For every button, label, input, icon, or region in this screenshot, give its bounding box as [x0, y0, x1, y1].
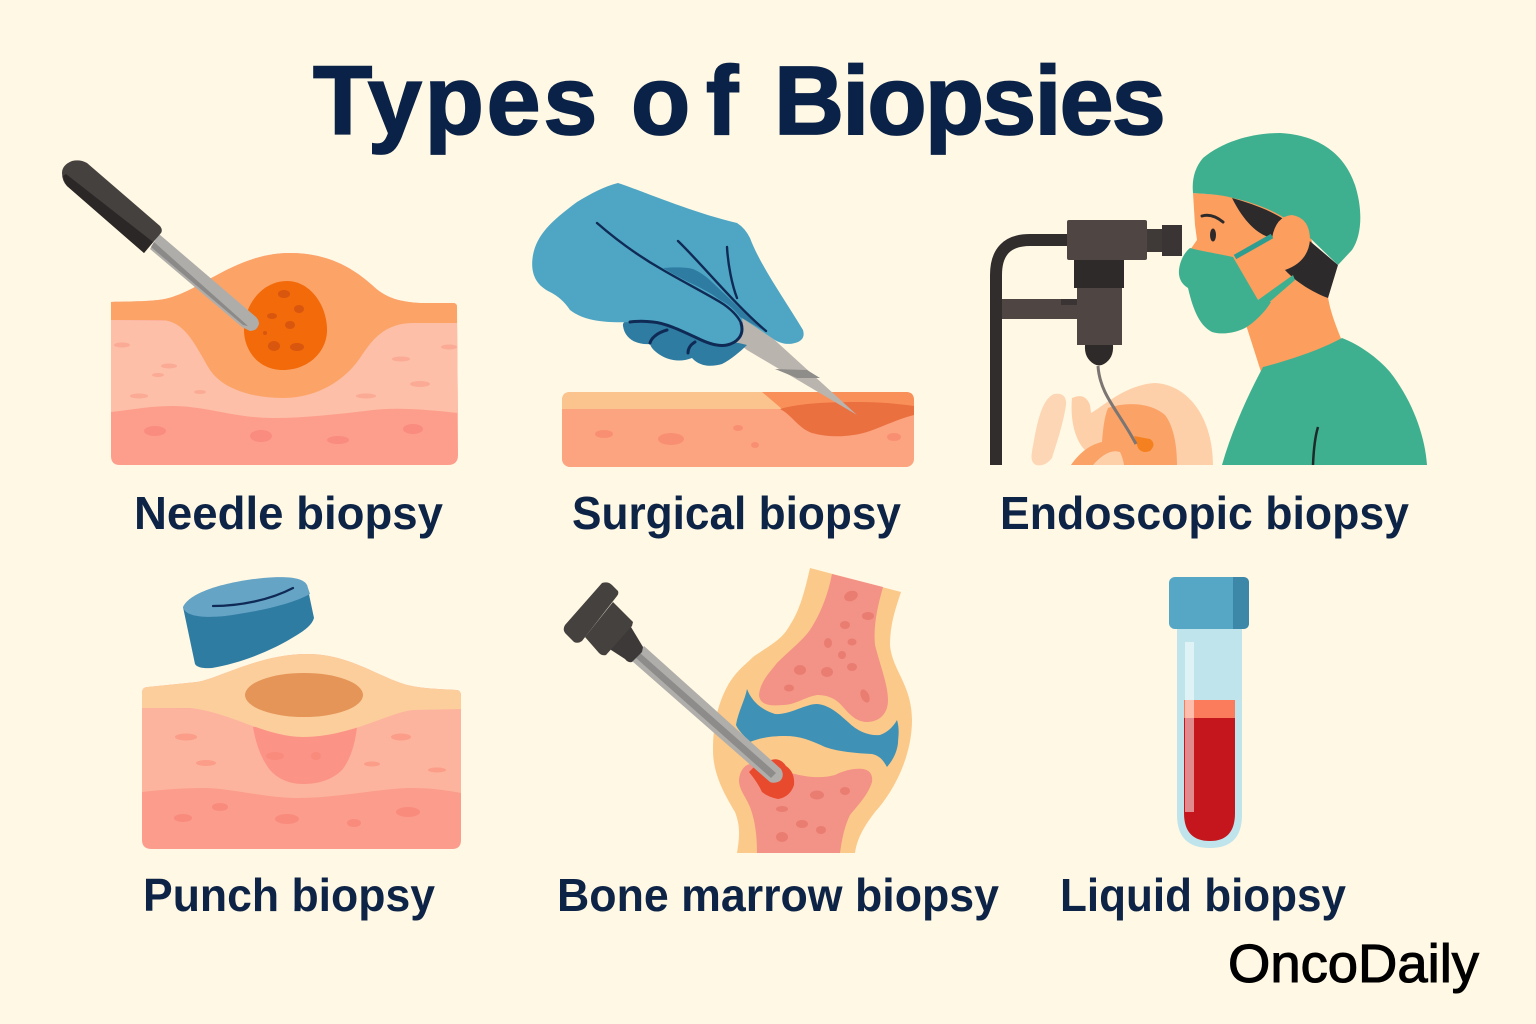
gloved hand: [532, 183, 804, 366]
label: endoscopic biopsy: Endoscopic biopsy: [1000, 487, 1409, 539]
logo: OncoDaily: OncoDaily: [1228, 934, 1479, 994]
panel: punch biopsy: [142, 577, 461, 849]
label: bone marrow biopsy: Bone marrow biopsy: [557, 869, 999, 921]
tube highlight: [1185, 642, 1194, 812]
skin layers: punch biopsy: [142, 654, 461, 849]
organ: [1032, 383, 1213, 465]
needle: [62, 160, 259, 331]
scalpel blade: [737, 318, 857, 415]
panel: bone marrow biopsy: [564, 568, 912, 853]
surgeon: [1179, 133, 1427, 465]
test tube glass: [1177, 625, 1242, 848]
endoscope stand: [996, 240, 1078, 465]
biopsy punch: [183, 577, 314, 668]
label: liquid biopsy: Liquid biopsy: [1060, 869, 1346, 921]
joint bone: [713, 568, 912, 853]
scope tube: [1098, 366, 1136, 444]
label: surgical biopsy: Surgical biopsy: [572, 487, 901, 539]
panel: needle biopsy: [62, 160, 458, 465]
trocar needle: [564, 582, 783, 783]
panel: surgical biopsy: [532, 183, 914, 467]
title: Biopsies: [774, 46, 1164, 155]
label: punch biopsy: Punch biopsy: [143, 869, 435, 921]
endoscope head: [1067, 220, 1182, 366]
title: o: [631, 46, 690, 155]
skin layers: needle biopsy: [111, 253, 458, 465]
skin layers: surgical biopsy: [562, 392, 914, 467]
surgical mask: [1179, 236, 1295, 333]
blood: [1184, 700, 1235, 841]
scrub top: [1222, 338, 1427, 465]
title: Types: [313, 46, 600, 155]
panel: liquid biopsy: [1169, 577, 1249, 848]
tube cap: [1169, 577, 1249, 629]
lesion: [749, 759, 794, 799]
label: needle biopsy: Needle biopsy: [134, 487, 443, 539]
title: f: [706, 46, 739, 155]
panel: endoscopic biopsy: [996, 133, 1427, 465]
joint cartilage: [736, 689, 899, 767]
tumor: [244, 281, 327, 370]
